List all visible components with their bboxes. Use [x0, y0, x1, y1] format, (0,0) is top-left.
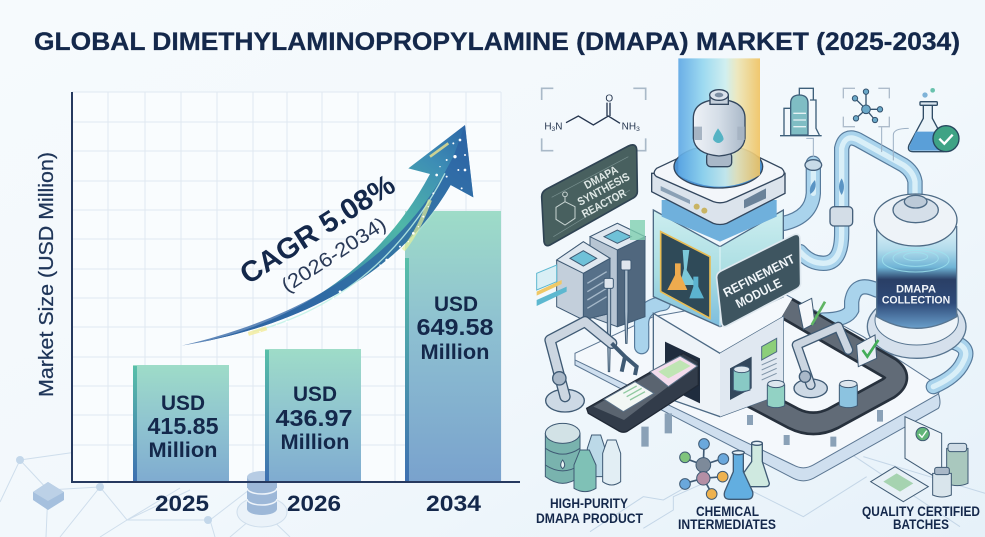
bar: 2025: USD — [161, 392, 205, 415]
bar: 2026: 436.97 — [276, 405, 352, 431]
certified documents on line — [798, 298, 878, 367]
caption: quality certified batches: BATCHES — [893, 517, 949, 532]
bar chart — [33, 92, 520, 516]
tank label: COLLECTION — [882, 294, 950, 306]
platform — [575, 293, 940, 481]
bar: 2025: Million — [148, 439, 218, 462]
synthesis reactor panel: DMAPA — [582, 164, 620, 192]
caption: high-purity product — [536, 496, 644, 526]
x axis labels: 2034 — [426, 491, 482, 516]
bar: 2026: Million — [280, 431, 350, 454]
plot area grid — [72, 92, 501, 482]
reactor head plate — [652, 173, 785, 224]
axes — [72, 92, 520, 482]
refinement module panel: REFINEMENT — [721, 252, 797, 300]
y axis title: Market Size (USD Million) — [36, 152, 58, 397]
caption: chemical intermediates: INTERMEDIATES — [678, 517, 776, 532]
molecule diagram — [542, 88, 646, 151]
light beam — [678, 58, 760, 187]
tower — [652, 142, 785, 417]
tank label: DMAPA — [896, 284, 936, 296]
molecule diagram: O — [605, 93, 613, 104]
x axis labels: 2026 — [287, 491, 341, 516]
bar: 2034: 649.58 — [416, 314, 494, 340]
decorative network background — [0, 435, 290, 537]
tower base — [653, 313, 783, 417]
conveyor belt right — [730, 308, 896, 447]
vials on conveyor — [733, 366, 857, 408]
molecule diagram: 3 — [636, 126, 640, 133]
caption: high-purity product: HIGH-PURITY — [550, 496, 628, 511]
bar: 2034: Million — [420, 341, 490, 364]
caption: chemical intermediates: CHEMICAL — [696, 504, 759, 519]
growth arrow — [182, 125, 473, 346]
CAGR label: (2026-2034) — [278, 213, 390, 297]
caption: high-purity product: DMAPA PRODUCT — [536, 511, 644, 526]
bar: 2034 — [405, 211, 501, 482]
synthesis reactor panel: REACTOR — [580, 187, 628, 221]
title: GLOBAL DIMETHYLAMINOPROPYLAMINE (DMAPA) MARKET (2025-2034) — [34, 28, 960, 56]
caption: chemical intermediates — [678, 504, 776, 532]
icon: chemical molecule — [680, 439, 729, 499]
CAGR label: CAGR 5.08% — [235, 169, 401, 291]
bar: 2025 — [133, 365, 229, 482]
icon: network molecule — [843, 88, 889, 127]
pipes — [642, 127, 966, 387]
icon: flasks — [724, 441, 769, 499]
synthesis reactor panel: SYNTHESIS — [576, 171, 632, 209]
icon: database stack — [247, 471, 277, 515]
circuit lines — [590, 453, 985, 532]
molecule diagram: H — [544, 121, 552, 132]
bar: 2025: 415.85 — [148, 413, 219, 439]
bar: 2034: USD — [434, 293, 478, 316]
bar: 2026 — [265, 349, 361, 482]
robotic arm right — [794, 327, 848, 398]
refinement module panel — [717, 234, 801, 327]
caption: quality certified batches — [862, 504, 980, 532]
molecule diagram: 3 — [552, 126, 556, 133]
collection tank — [867, 194, 966, 358]
synthesis reactor panel — [542, 145, 637, 246]
icon: certificate and vials — [871, 417, 968, 502]
molecule diagram: NH — [622, 121, 636, 132]
reactor vessel — [693, 90, 745, 167]
flask panel — [661, 232, 710, 318]
x axis labels — [155, 491, 482, 516]
bar: 2026: USD — [293, 383, 337, 406]
conveyor belt left — [587, 353, 698, 447]
glass column — [653, 210, 783, 327]
icon: distillation column — [780, 88, 822, 136]
icon: barrel and bottles — [545, 423, 621, 492]
process illustration — [537, 58, 985, 532]
refinement module panel: MODULE — [733, 276, 784, 311]
robotic arm left — [546, 322, 637, 412]
icon: flask with check — [908, 88, 959, 152]
pipettes — [604, 260, 631, 372]
tank label — [882, 284, 950, 306]
icon: layers — [33, 482, 64, 510]
data servers — [537, 220, 645, 327]
molecule diagram: N — [555, 121, 562, 132]
x axis labels: 2025 — [155, 491, 209, 516]
